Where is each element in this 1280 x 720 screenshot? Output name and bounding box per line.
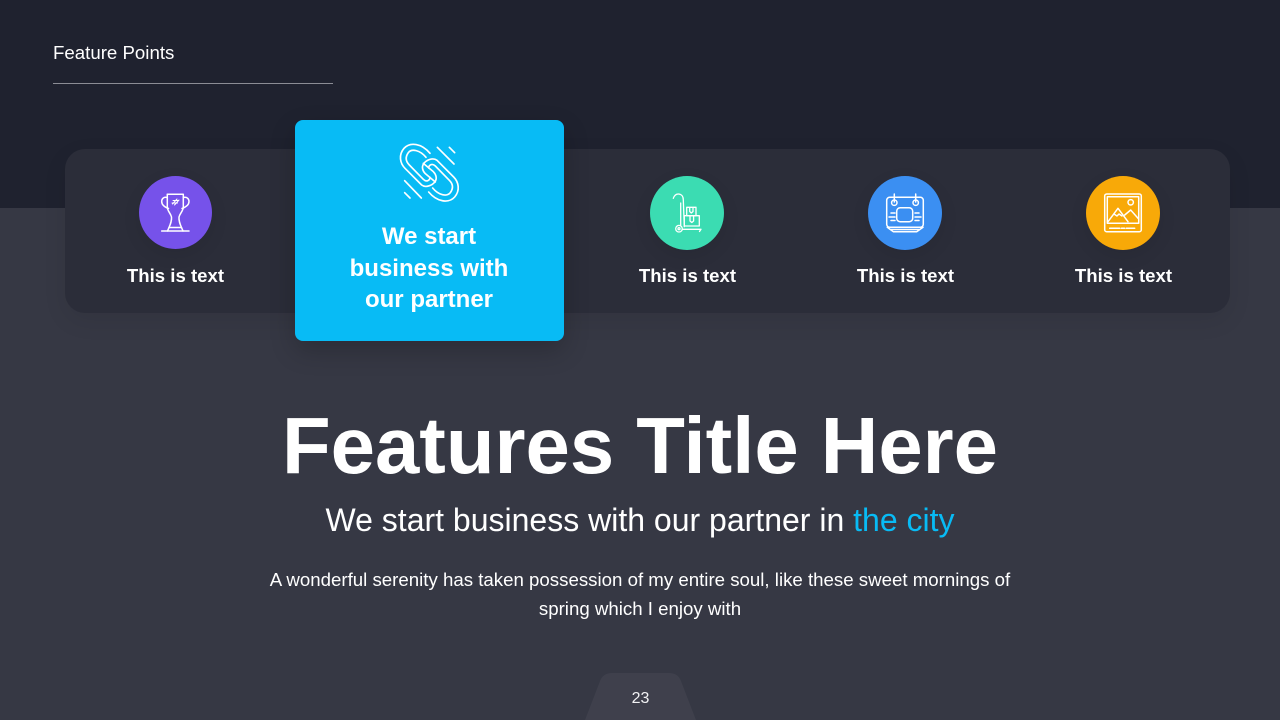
panel: highlighted blue card	[295, 120, 564, 341]
heading: feature points: Feature Points	[53, 42, 174, 63]
page number tab	[586, 673, 696, 720]
icon: trolley circle	[650, 176, 724, 250]
card text: our partner	[365, 286, 493, 313]
card text	[350, 223, 508, 313]
dark top band	[0, 0, 1280, 208]
label: picture feature: This is text	[1075, 265, 1172, 286]
icon: chain link	[400, 144, 459, 202]
card text: We start	[382, 223, 476, 250]
body text: A wonderful serenity has taken possession of my entire soul, like these sweet mornings of	[270, 569, 1010, 590]
icon: trophy circle	[139, 176, 212, 249]
icon: calendar device circle	[868, 176, 942, 250]
body text: spring which I enjoy with	[539, 598, 741, 619]
page number: 23	[632, 690, 649, 707]
label: trophy feature: This is text	[127, 265, 224, 286]
card text: business with	[350, 254, 508, 282]
title: Features Title Here	[282, 401, 998, 490]
panel: feature strip	[65, 149, 1230, 313]
subtitle: We start business with our partner in the city	[325, 502, 954, 538]
body text	[270, 569, 1010, 619]
label: trolley feature: This is text	[639, 265, 736, 286]
label: calendar feature: This is text	[857, 265, 954, 286]
icon: picture frame circle	[1086, 176, 1160, 250]
